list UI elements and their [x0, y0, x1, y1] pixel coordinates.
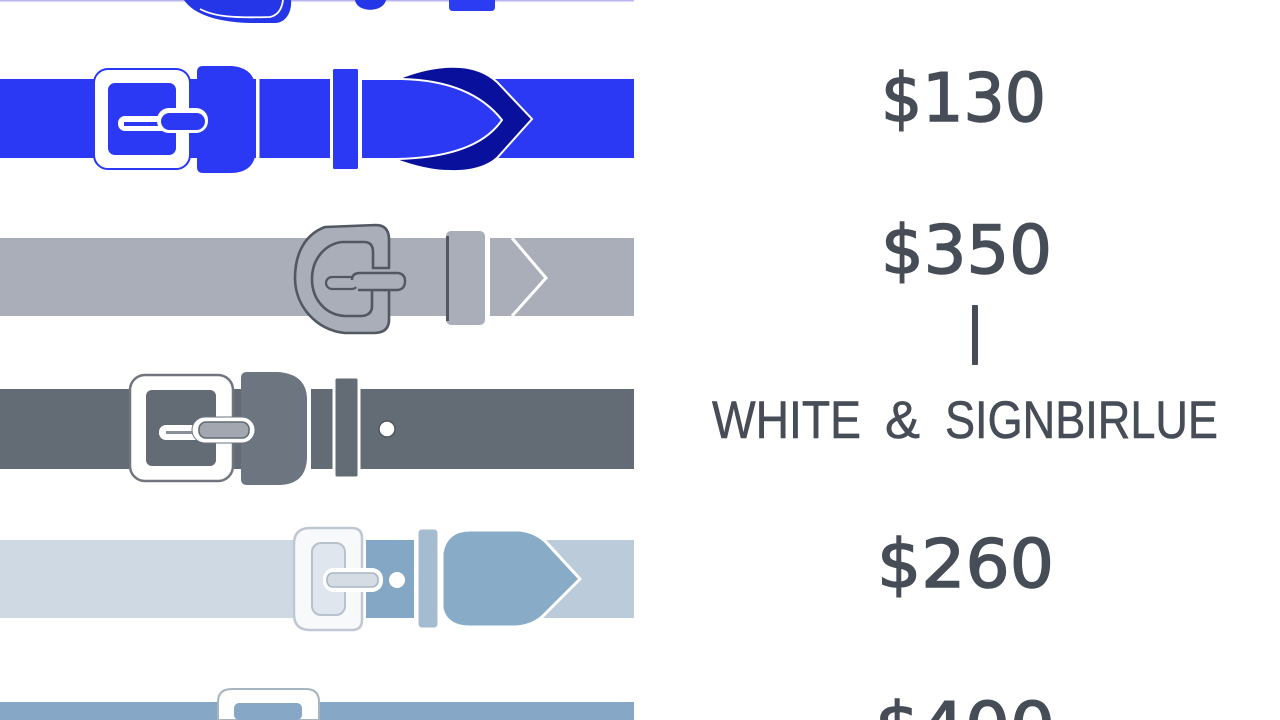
buckle tongue — [118, 116, 168, 131]
buckle frame — [294, 528, 362, 630]
belt: grey — [0, 225, 634, 333]
loop — [446, 231, 485, 325]
buckle frame — [94, 69, 190, 169]
divider mark — [972, 305, 978, 365]
label: white and signature blue: WHITE — [712, 391, 861, 450]
price: $350: $350 — [881, 211, 1052, 289]
tip chevron — [512, 238, 546, 316]
belt: dark slate — [0, 372, 634, 485]
price: $260: $260 — [877, 525, 1054, 603]
leather end — [241, 372, 307, 485]
hole — [379, 421, 395, 437]
belt: steel blue, cropped — [0, 689, 634, 720]
loop — [418, 529, 438, 628]
label: white and signature blue: SIGNBIRLUE — [945, 391, 1218, 450]
price: $130: $130 — [881, 59, 1046, 137]
label: white and signature blue — [712, 391, 1218, 450]
label: white and signature blue: & — [885, 391, 920, 450]
tip — [442, 530, 580, 627]
belt: royal blue — [0, 66, 634, 173]
tongue — [159, 425, 209, 440]
buckle G shape — [295, 225, 389, 333]
belt tip — [394, 67, 532, 171]
leather end — [197, 66, 256, 173]
buckle frame — [218, 689, 319, 720]
belt loop — [332, 68, 360, 170]
belt: pale blue — [0, 528, 634, 630]
tongue — [323, 568, 383, 592]
belt: cropped blue-violet belt at top — [0, 0, 634, 23]
loop — [334, 377, 359, 478]
hole — [389, 572, 405, 588]
buckle frame — [130, 375, 233, 481]
